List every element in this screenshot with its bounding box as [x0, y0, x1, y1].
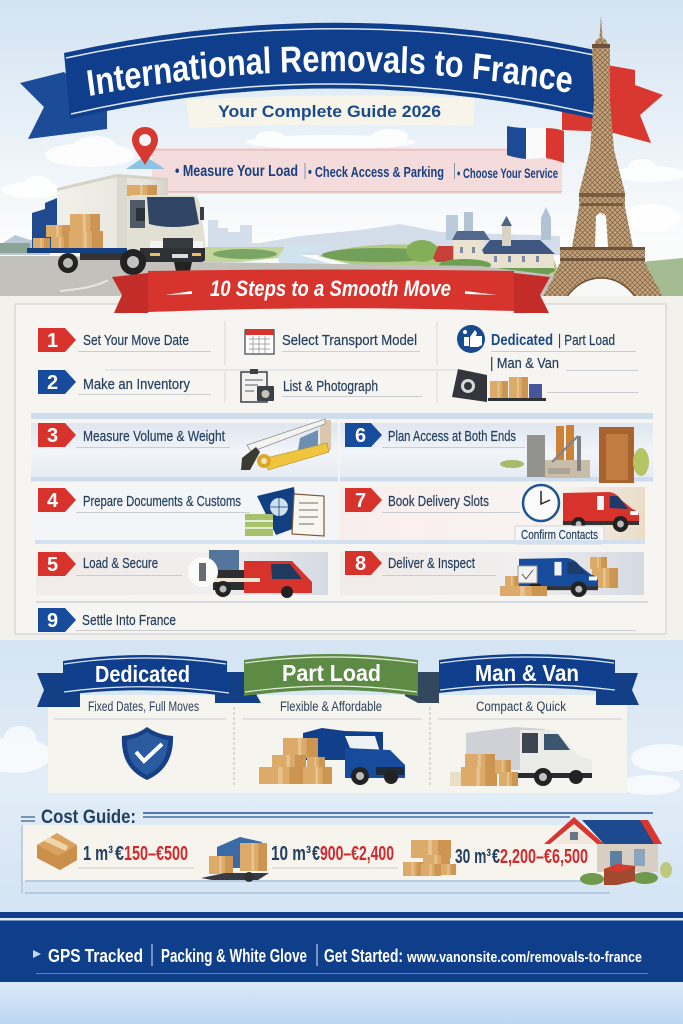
cost item: 1 m3 [37, 833, 194, 870]
step 2 [38, 370, 211, 394]
panel: cost guide [22, 817, 672, 893]
subtitle ribbon [186, 95, 475, 128]
panel: step 4 [31, 487, 338, 540]
panel: step 3 [31, 419, 338, 482]
service: man and van [439, 654, 639, 786]
panel: service comparison [37, 654, 639, 793]
icon: shield [122, 727, 173, 780]
panel: step 6 [340, 423, 653, 483]
service: part load: Part Load [282, 660, 381, 686]
clouds [2, 129, 683, 232]
icon: white truck with boxes [450, 727, 592, 786]
panel: step 5: 5 [47, 554, 58, 576]
panel: step 7: 7 [355, 490, 366, 512]
checklist bar: • Check Access & Parking [308, 164, 444, 181]
checklist bar: • Choose Your Service [457, 165, 558, 181]
step 1 [38, 328, 211, 352]
icon: house [544, 817, 672, 885]
strip above steps 3 and 6 [31, 413, 653, 419]
cost item: 10 m3 [201, 837, 398, 882]
step 2 rule [282, 396, 422, 398]
icon: clipboard and camera [241, 369, 274, 402]
icon: map pin [126, 127, 165, 169]
panel: step 6: 6 [355, 425, 366, 447]
steps banner: 10 Steps to a Smooth Move [210, 276, 451, 301]
panel: step 3: 3 [47, 425, 58, 447]
service: man and van: Compact & Quick [476, 699, 566, 714]
cost item: 30 m3: 30 m³ [455, 846, 491, 868]
checklist bar [152, 148, 562, 194]
footer band: GPS Tracked [48, 946, 143, 966]
panel: step 4: 4 [47, 490, 59, 512]
right grass [640, 258, 683, 300]
step 2 text: List & Photograph [283, 379, 378, 395]
service: man and van: Man & Van [475, 660, 579, 686]
service: dedicated [37, 655, 261, 780]
service: dedicated: Fixed Dates, Full Moves [88, 699, 199, 714]
footer band [0, 912, 683, 982]
step 1 service text: Select Transport Model [282, 333, 417, 349]
icon: camera and boxes [452, 369, 546, 402]
step 1: 1 [47, 330, 58, 352]
cost item: 10 m3: 10 m³ [271, 843, 311, 865]
icon: tape measure and square [241, 419, 331, 470]
icon: clock [523, 485, 559, 521]
cost item: 1 m3: 1 m³ [83, 843, 113, 865]
cost guide heading [21, 807, 653, 828]
cost item: 10 m3: € [312, 843, 320, 865]
panel: step 8: 8 [355, 553, 366, 575]
service options [490, 332, 638, 392]
step 9: Settle Into France [82, 613, 176, 629]
title text: International Removals to France [87, 46, 572, 96]
icon: dedicated thumbs up badge [457, 325, 485, 353]
cost item: 30 m3: 2,200–€6,500 [500, 846, 588, 868]
step 9: 9 [47, 610, 58, 632]
background: hero sky [0, 0, 683, 300]
step 1 calendar icon [245, 329, 274, 354]
service options: | Part Load [558, 333, 615, 349]
road [0, 256, 560, 300]
title ribbon: main banner [64, 22, 594, 119]
service: dedicated: Dedicated [95, 661, 190, 687]
background: bottom gradient [0, 982, 683, 1024]
step 1 rule [282, 350, 420, 352]
service options: Dedicated [491, 332, 553, 349]
title ribbon: red right tail [562, 65, 663, 143]
illustration: removal truck [27, 174, 205, 275]
footer band: Get Started: [324, 946, 403, 966]
callout: confirm contacts [515, 526, 604, 544]
step 2: Make an Inventory [83, 377, 191, 393]
checklist bar: • Measure Your Load [175, 163, 298, 180]
panel: step 6: Plan Access at Both Ends [388, 429, 516, 445]
steps panel [0, 296, 683, 640]
icon: passport, cash and clipboard [245, 487, 324, 536]
panel: step 8: Deliver & Inspect [388, 556, 475, 572]
rule between rows [35, 540, 645, 544]
panel: step 3: Measure Volume & Weight [83, 429, 225, 445]
icon: red van [563, 492, 639, 532]
background: lower sky [0, 640, 683, 920]
icon: french flag [507, 126, 564, 163]
panel: step 7: Book Delivery Slots [388, 494, 489, 510]
service options: | Man & Van [490, 356, 559, 372]
step 2: 2 [47, 372, 58, 394]
cost item: 1 m3: 150–€500 [124, 843, 188, 865]
cost item: 30 m3: € [492, 846, 500, 868]
dividers [105, 321, 460, 403]
lower clouds [0, 726, 683, 795]
icon: cargo on red truck [188, 550, 312, 598]
panel: step 7 [340, 485, 645, 544]
cost guide heading: Cost Guide: [41, 807, 136, 828]
distant skyline and landscape [0, 207, 560, 275]
road marking [60, 280, 108, 291]
service: part load: Flexible & Affordable [280, 699, 382, 714]
panel: step 5: Load & Secure [83, 556, 158, 572]
icon: steps and door [500, 425, 649, 483]
panel: step 5 [36, 550, 328, 598]
french chateau [433, 216, 555, 278]
icon: blue truck with boxes [259, 728, 405, 785]
rule below row [36, 601, 648, 603]
icon: blue van and boxes [500, 557, 618, 597]
eiffel tower [542, 15, 664, 298]
step 9 [38, 608, 636, 632]
footer band: Packing & White Glove [161, 946, 307, 966]
service: part load [244, 654, 439, 785]
panel: step 8 [340, 551, 644, 597]
cost item: 1 m3: € [115, 843, 124, 865]
callout: confirm contacts: Confirm Contacts [521, 528, 598, 542]
title ribbon: blue left tail [20, 72, 107, 139]
cost item: 30 m3 [403, 840, 588, 876]
panel: step 4: Prepare Documents & Customs [83, 494, 241, 510]
subtitle ribbon: Your Complete Guide 2026 [218, 102, 441, 121]
steps banner [112, 270, 550, 313]
step 1: Set Your Move Date [83, 333, 189, 349]
footer band: www.vanonsite.com/removals-to-france [406, 950, 642, 966]
cost item: 10 m3: 900–€2,400 [320, 843, 394, 865]
